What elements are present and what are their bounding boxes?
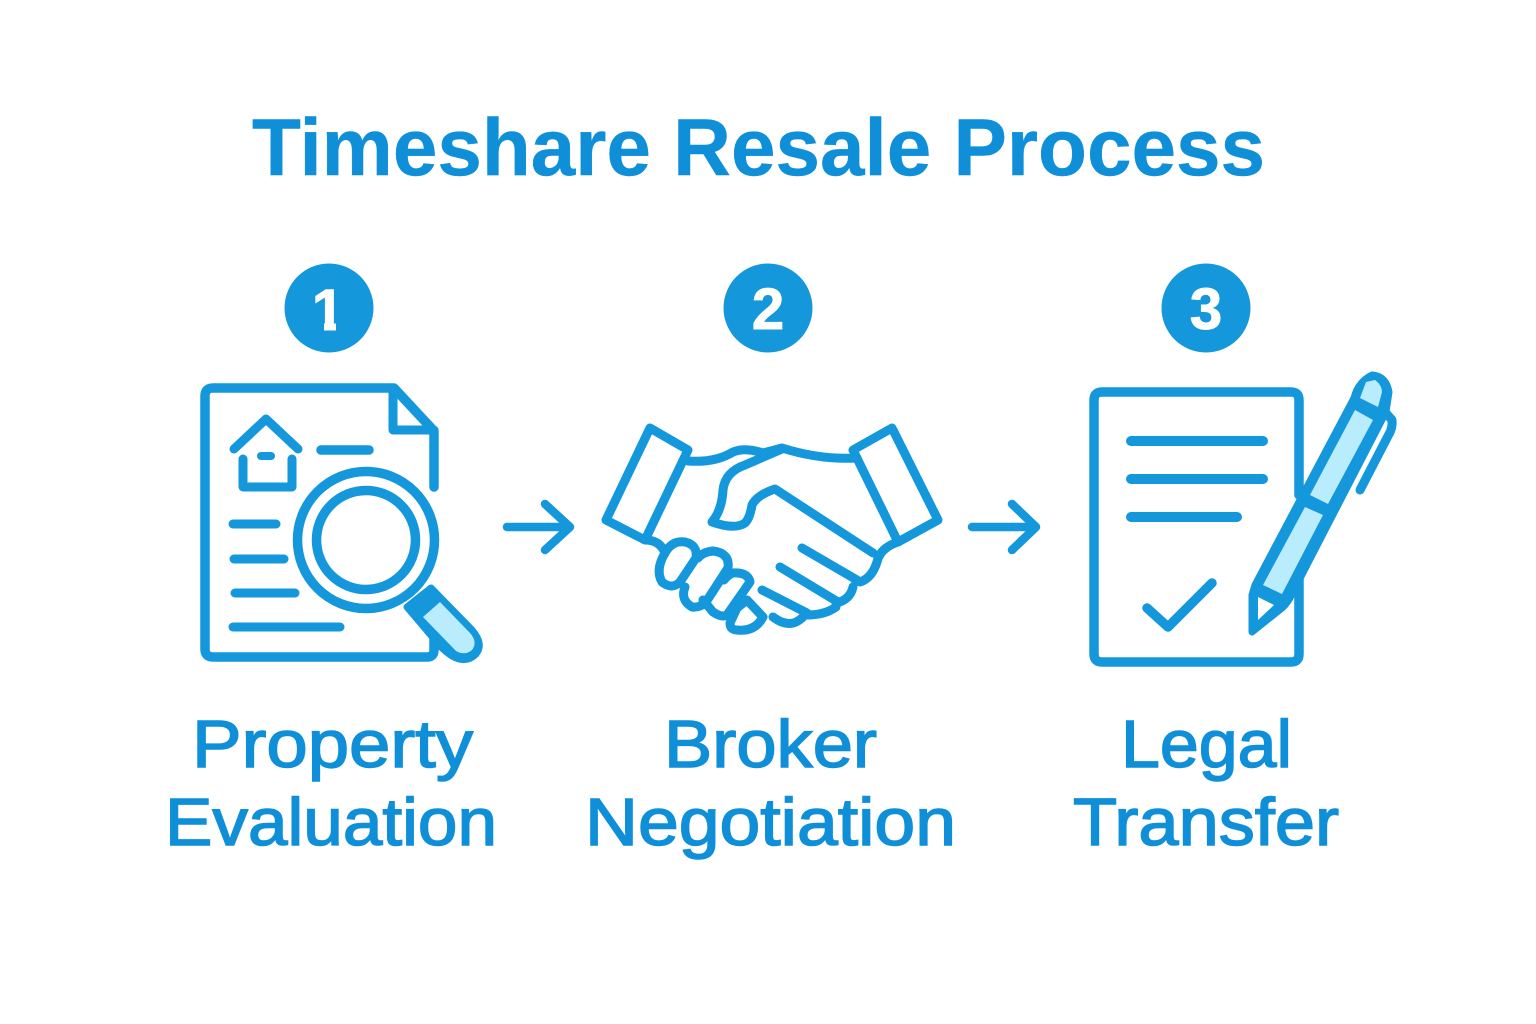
label: Property Evaluation	[165, 707, 497, 860]
step 2 number badge: 2	[752, 277, 784, 342]
label: Legal Transfer: Transfer	[1073, 785, 1339, 860]
label: Legal Transfer	[1073, 707, 1339, 860]
step 1 number badge: 1	[312, 278, 344, 343]
step 3 number badge: 3	[1190, 277, 1222, 342]
icon: signed document with pen	[1094, 375, 1392, 662]
step 2 number badge	[724, 264, 812, 352]
title: Timeshare Resale Process	[252, 103, 1265, 193]
label: Property Evaluation: Property	[192, 707, 474, 782]
arrow: step 2 to step 3	[972, 504, 1036, 550]
label: Broker Negotiation: Negotiation	[585, 785, 956, 860]
label: Property Evaluation: Evaluation	[165, 785, 497, 860]
step 3 number badge	[1162, 264, 1250, 352]
label: Broker Negotiation	[585, 707, 956, 860]
step 1 number badge	[284, 264, 374, 352]
label: Broker Negotiation: Broker	[664, 707, 877, 782]
arrow: step 1 to step 2	[507, 504, 570, 550]
icon: handshake	[606, 428, 938, 630]
icon: property document with magnifier	[205, 388, 479, 660]
label: Legal Transfer: Legal	[1121, 707, 1292, 782]
